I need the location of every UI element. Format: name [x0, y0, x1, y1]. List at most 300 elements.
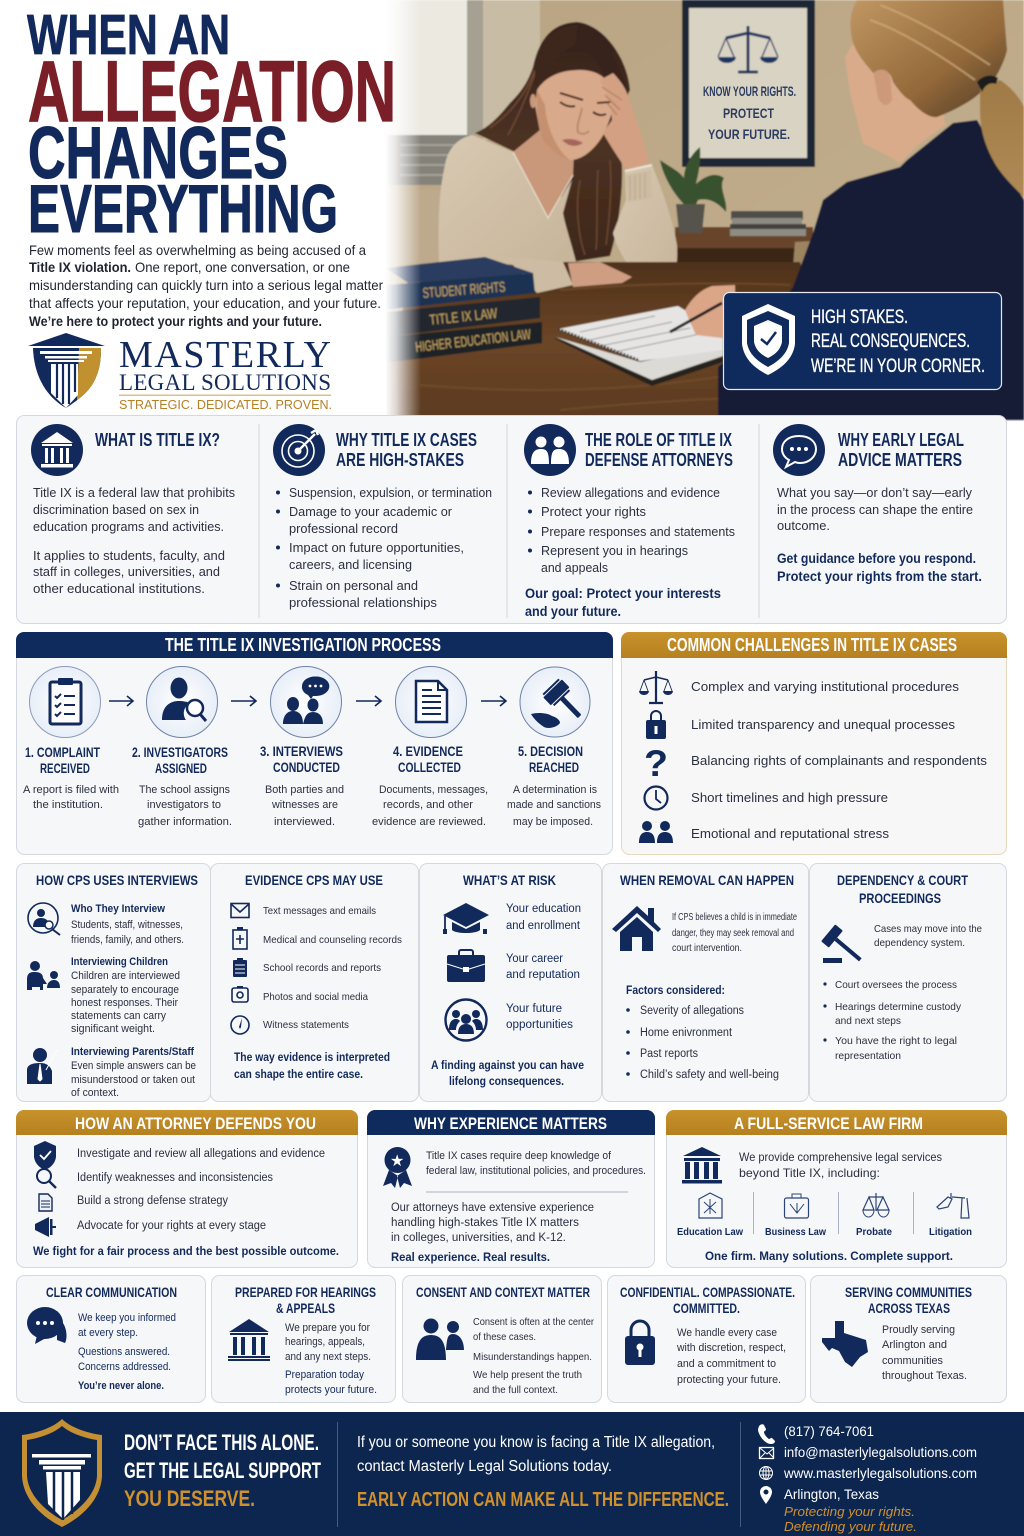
panel: clear communication: Questions answered. — [78, 1346, 170, 1358]
intro text: One report, one conversation, or one — [135, 259, 350, 275]
panel: evidence CPS may use: Medical and counseling records — [263, 934, 402, 946]
panel: prepared for hearings: PREPARED FOR HEARINGS — [235, 1284, 376, 1300]
panel: a full-service law firm: We provide comprehensive legal services — [739, 1150, 942, 1164]
contact details: info@masterlylegalsolutions.com — [784, 1444, 977, 1460]
panel: consent and context — [402, 1276, 602, 1402]
panel: clear communication: We keep you informed — [78, 1312, 176, 1324]
header: attorney defends — [16, 1110, 358, 1135]
text: contact prompt: EARLY ACTION CAN MAKE ALL THE DIFFERENCE. — [357, 1489, 729, 1511]
contact details — [758, 1423, 977, 1504]
panel: how an attorney defends you: Advocate for your rights at every stage — [77, 1220, 266, 1232]
panel: serving communities across Texas: SERVING COMMUNITIES — [845, 1284, 972, 1300]
column: why high-stakes — [273, 424, 492, 610]
panel: when removal can happen: court intervention. — [672, 943, 742, 954]
step 4: evidence collected: Documents, messages, — [379, 784, 488, 796]
icon: chat bubbles — [27, 1307, 66, 1344]
logo shield — [28, 333, 105, 408]
panel: how CPS uses interviews: misunderstood or taken out — [71, 1074, 195, 1086]
text: interpretation note: The way evidence is interpreted — [234, 1052, 390, 1064]
panel: consent and context: Misunderstandings happen. — [473, 1351, 592, 1363]
column: early legal advice: ADVICE MATTERS — [838, 449, 962, 470]
icon: attorneys — [524, 424, 576, 476]
column: what is Title IX — [31, 424, 235, 596]
step 2: investigators assigned: gather information. — [138, 816, 232, 828]
header: attorney defends: HOW AN ATTORNEY DEFENDS YOU — [75, 1114, 316, 1133]
panel: clear communication: You’re never alone. — [78, 1380, 164, 1392]
footer call to action — [0, 1412, 1024, 1536]
panel: evidence CPS may use: Witness statements — [263, 1019, 349, 1031]
step 4: evidence collected: COLLECTED — [398, 760, 461, 775]
icon: camera — [232, 986, 248, 1002]
icon: target — [273, 424, 325, 476]
icon: clipboard — [30, 666, 100, 738]
text: interpretation note — [234, 1052, 390, 1081]
list: attorney duties — [528, 485, 735, 575]
step 2: investigators assigned: investigators to — [147, 799, 221, 811]
panel: dependency and court proceedings: and next steps — [835, 1015, 901, 1027]
tagline: Defending your future. — [784, 1519, 917, 1534]
panel: serving communities across Texas: ACROSS TEXAS — [868, 1300, 950, 1316]
intro text — [29, 242, 383, 329]
text: lifelong consequences: A finding against you can have — [431, 1060, 584, 1072]
icon: envelope — [760, 1448, 774, 1458]
column: early legal advice: WHY EARLY LEGAL — [838, 429, 964, 450]
title — [27, 3, 396, 247]
panel: what's at risk: WHAT’S AT RISK — [463, 872, 556, 888]
panel: when removal can happen: If CPS believes a child is in immediate — [672, 912, 797, 923]
column: role of defense attorneys: THE ROLE OF TITLE IX — [585, 429, 732, 450]
icon: lock — [646, 711, 666, 739]
panel: why experience matters — [367, 1110, 655, 1268]
panel: what's at risk: and enrollment — [506, 920, 581, 932]
list: factors considered: Severity of allegations — [640, 1005, 744, 1017]
icon: courthouse — [228, 1319, 270, 1361]
icon: phone — [758, 1424, 775, 1444]
title: CHANGES — [28, 113, 288, 194]
icon: clock — [644, 786, 668, 810]
icon: award ribbon — [383, 1147, 412, 1188]
panel: investigation process — [16, 632, 613, 854]
step 1: complaint received — [23, 666, 119, 811]
step 3: interviews conducted: witnesses are — [271, 799, 338, 811]
panel: clear communication — [16, 1276, 206, 1402]
list: consequences — [276, 485, 492, 610]
icon: scales — [639, 671, 673, 703]
text: fair process: We fight for a fair process and the best possible outcome. — [33, 1244, 339, 1258]
contact details: www.masterlylegalsolutions.com — [783, 1465, 977, 1481]
text: what is Title IX: It applies to students, faculty, and — [33, 548, 225, 563]
step 5: decision reached: made and sanctions — [507, 799, 601, 811]
panel: evidence CPS may use: EVIDENCE CPS MAY USE — [245, 872, 383, 888]
panel: how CPS uses interviews: friends, family, and others. — [71, 934, 184, 946]
panel: how CPS uses interviews: Interviewing Parents/Staff — [71, 1046, 194, 1058]
contact details: Arlington, Texas — [784, 1486, 879, 1502]
panel: dependency and court proceedings: Court oversees the process — [835, 979, 957, 991]
icon: law firm building — [682, 1147, 722, 1184]
icon: megaphone — [35, 1217, 56, 1237]
panel: consent and context: Consent is often at the center — [473, 1316, 594, 1328]
header: full-service: A FULL-SERVICE LAW FIRM — [734, 1114, 923, 1133]
step 2: investigators assigned — [132, 666, 232, 828]
panel: serving communities across Texas — [810, 1276, 1006, 1402]
column: why high-stakes: ARE HIGH-STAKES — [336, 449, 464, 470]
panel: how an attorney defends you: Identify weaknesses and inconsistencies — [77, 1172, 273, 1184]
step 1: complaint received: RECEIVED — [40, 761, 90, 776]
arrow — [481, 696, 506, 706]
panel: how an attorney defends you: Investigate and review all allegations and evidence — [77, 1148, 325, 1160]
text: what is Title IX: other educational institutions. — [33, 581, 205, 596]
column: early legal advice — [773, 424, 982, 584]
panel: dependency and court proceedings: dependency system. — [874, 937, 965, 949]
panel: prepared for hearings: and any next steps. — [285, 1351, 371, 1363]
panel: confidential, compassionate, committed — [608, 1276, 806, 1402]
step 3: interviews conducted — [260, 666, 344, 828]
panel: a full-service law firm — [666, 1110, 1007, 1268]
tagline: Protecting your rights. — [784, 1504, 915, 1519]
icon: business law — [784, 1194, 808, 1218]
icon: envelope — [231, 904, 249, 918]
step 5: decision reached: 5. DECISION — [518, 744, 583, 759]
panel: prepared for hearings: protects your future. — [285, 1384, 377, 1396]
panel: when removal can happen — [602, 864, 808, 1102]
list: consequences: Damage to your academic or — [289, 504, 453, 519]
panel: dependency and court proceedings: representation — [835, 1050, 901, 1062]
panel: how CPS uses interviews: honest responses. Their — [71, 997, 178, 1009]
step 2: investigators assigned: The school assigns — [139, 784, 230, 796]
text: our goal — [525, 586, 721, 619]
list: attorney duties: Prepare responses and statements — [541, 524, 735, 539]
column: what is Title IX: WHAT IS TITLE IX? — [95, 429, 220, 450]
step 3: interviews conducted: Both parties and — [265, 784, 344, 796]
panel: evidence CPS may use: School records and reports — [263, 962, 381, 974]
text: lifelong consequences — [431, 1060, 584, 1088]
text: don't face this alone: GET THE LEGAL SUPPORT — [124, 1458, 321, 1483]
panel: what's at risk: and reputation — [506, 969, 580, 981]
text: get guidance: Get guidance before you respond. — [777, 551, 976, 566]
list: consequences: careers, and licensing — [289, 557, 412, 572]
step 5: decision reached: A determination is — [513, 784, 597, 796]
icon: school record — [233, 958, 247, 977]
step 5: decision reached: may be imposed. — [513, 816, 593, 828]
icon: future group — [446, 1000, 486, 1040]
text: early advice — [777, 485, 973, 533]
text: contact prompt: If you or someone you know is facing a Title IX allegation, — [357, 1434, 715, 1451]
panel: clear communication: at every step. — [78, 1327, 138, 1339]
list: attorney duties: Protect your rights — [541, 504, 646, 519]
panel: dependency and court proceedings: DEPENDENCY & COURT — [837, 872, 968, 888]
logo: Masterly Legal Solutions: MASTERLY — [119, 334, 331, 376]
title: ALLEGATION — [28, 44, 396, 140]
panel: dependency and court proceedings — [810, 864, 1006, 1102]
icon: medical record — [233, 927, 247, 949]
panel: why experience matters: federal law, institutional policies, and procedures. — [426, 1165, 646, 1177]
icon: padlock — [625, 1321, 655, 1365]
white fade behind the headline — [0, 0, 421, 420]
logo: Masterly Legal Solutions: LEGAL SOLUTIONS — [119, 370, 331, 395]
panel: a full-service law firm: Probate — [856, 1226, 892, 1238]
panel: common challenges: Complex and varying institutional procedures — [691, 679, 960, 694]
step 4: evidence collected — [372, 666, 488, 828]
icon: house — [612, 906, 661, 951]
text: interpretation note: can shape the entire case. — [234, 1069, 363, 1081]
hero photo: distressed student with attorney: HIGHER EDUCATION LAW — [415, 327, 532, 356]
step 3: interviews conducted: 3. INTERVIEWS — [260, 744, 343, 759]
list: factors considered: Factors considered: — [626, 985, 725, 997]
text: don't face this alone: DON’T FACE THIS ALONE. — [124, 1430, 319, 1455]
text: what is Title IX: education programs and activities. — [33, 519, 224, 534]
icon: people — [639, 821, 673, 843]
panel: how CPS uses interviews: Interviewing Children — [71, 956, 168, 968]
callout: high stakes: HIGH STAKES. — [811, 307, 908, 328]
panel: clear communication: CLEAR COMMUNICATION — [46, 1284, 177, 1300]
intro text: that affects your reputation, your education, and your future. — [29, 295, 381, 311]
panel: dependency and court proceedings: Hearings determine custody — [835, 1001, 962, 1013]
text: contact prompt: contact Masterly Legal Solutions today. — [357, 1458, 612, 1475]
logo: Masterly Legal Solutions: STRATEGIC. DEDICATED. PROVEN. — [119, 397, 332, 412]
panel: evidence CPS may use: Photos and social media — [263, 991, 368, 1003]
panel: confidential, compassionate, committed: CONFIDENTIAL. COMPASSIONATE. — [620, 1284, 795, 1300]
panel: common challenges: Short timelines and high pressure — [691, 790, 888, 805]
panel: confidential, compassionate, committed: and a commitment to — [677, 1358, 776, 1370]
icon: award ribbon: ★ — [390, 1153, 404, 1170]
step 3: interviews conducted: CONDUCTED — [273, 760, 340, 775]
icon: shield — [34, 1141, 56, 1170]
panel: common challenges: Emotional and reputational stress — [691, 826, 890, 841]
icon: parent and child — [27, 961, 60, 990]
icon: courthouse — [31, 424, 83, 476]
panel: how CPS uses interviews: significant weight. — [71, 1023, 155, 1035]
panel: evidence CPS may use — [210, 864, 418, 1102]
panel: confidential, compassionate, committed: with discretion, respect, — [676, 1342, 786, 1354]
icon: litigation — [937, 1193, 969, 1218]
tagline — [784, 1504, 917, 1534]
icon: probate — [863, 1193, 889, 1217]
icon: investigator — [146, 666, 218, 738]
header: investigation process — [16, 632, 613, 658]
arrow — [109, 696, 133, 706]
panel: consent and context: We help present the truth — [473, 1369, 582, 1381]
icon: interview group — [270, 666, 342, 738]
logo: Masterly Legal Solutions — [28, 333, 332, 412]
icon: gavel — [520, 667, 590, 737]
column: role of defense attorneys — [524, 424, 735, 619]
panel: a full-service law firm: beyond Title IX, including: — [739, 1166, 880, 1180]
list: factors considered: Past reports — [640, 1048, 698, 1060]
icon: question mark: ? — [644, 743, 668, 784]
panel: clear communication: Concerns addressed. — [78, 1361, 171, 1373]
step 3: interviews conducted: interviewed. — [274, 816, 335, 828]
intro text: Few moments feel as overwhelming as being accused of a — [29, 242, 366, 258]
panel: what's at risk: Your future — [506, 1003, 562, 1015]
step 4: evidence collected: evidence are reviewed. — [372, 816, 486, 828]
panel: how CPS uses interviews: statements can carry — [71, 1010, 166, 1022]
icon: briefcase — [447, 950, 485, 982]
panel: why experience matters: in colleges, universities, and K-12. — [391, 1232, 566, 1244]
text: lifelong consequences: lifelong consequences. — [449, 1076, 564, 1088]
panel: how CPS uses interviews: of context. — [71, 1087, 119, 1099]
panel: prepared for hearings: hearings, appeals, — [285, 1336, 365, 1348]
header: investigation process: THE TITLE IX INVESTIGATION PROCESS — [165, 635, 441, 655]
icon: graduation cap — [443, 903, 489, 934]
text: early advice: outcome. — [777, 518, 830, 533]
text: don't face this alone: YOU DESERVE. — [124, 1486, 255, 1511]
panel: a full-service law firm: Education Law — [677, 1226, 744, 1238]
list: consequences: Strain on personal and — [289, 578, 418, 593]
panel: common challenges: Balancing rights of complainants and respondents — [691, 753, 988, 768]
panel: why experience matters: handling high-stakes Title IX matters — [391, 1217, 579, 1229]
text: our goal: and your future. — [525, 604, 621, 619]
intro text: We’re here to protect your rights and your future. — [29, 313, 322, 329]
panel: common challenges: Limited transparency and unequal processes — [691, 717, 956, 732]
panel: what's at risk — [420, 864, 602, 1102]
list: factors considered: Home enivronment — [640, 1027, 733, 1039]
list: consequences: professional record — [289, 521, 398, 536]
hero photo: distressed student with attorney: STUDENT RIGHTS — [422, 280, 506, 302]
panel: why experience matters: Our attorneys have extensive experience — [391, 1202, 594, 1214]
poster text in hero photo — [703, 83, 796, 142]
panel: serving communities across Texas: Arlington and — [882, 1339, 947, 1351]
panel: when removal can happen: WHEN REMOVAL CAN HAPPEN — [620, 872, 794, 888]
panel: evidence CPS may use: Text messages and emails — [263, 905, 376, 917]
list: consequences: professional relationships — [289, 595, 437, 610]
panel: how an attorney defends you: Build a strong defense strategy — [77, 1195, 228, 1207]
icon: location pin — [760, 1486, 772, 1504]
header: why experience matters: WHY EXPERIENCE MATTERS — [414, 1114, 607, 1133]
column: why high-stakes: WHY TITLE IX CASES — [336, 429, 477, 450]
text: one firm: One firm. Many solutions. Complete support. — [705, 1249, 953, 1263]
arrow — [356, 696, 381, 706]
text: early advice: What you say—or don’t say—early — [777, 485, 972, 500]
panel: consent and context: and the full context. — [473, 1384, 558, 1396]
panel: prepared for hearings — [212, 1276, 396, 1402]
panel: how CPS uses interviews: HOW CPS USES INTERVIEWS — [36, 872, 198, 888]
panel: how CPS uses interviews — [16, 864, 210, 1102]
text: don't face this alone — [124, 1430, 321, 1511]
panel: confidential, compassionate, committed: protecting your future. — [677, 1374, 781, 1386]
text: contact prompt — [357, 1434, 729, 1511]
icon: document — [396, 666, 466, 738]
contact details: (817) 764-7061 — [784, 1423, 874, 1439]
poster text in hero photo: KNOW YOUR RIGHTS. — [703, 83, 796, 99]
hero photo: distressed student with attorney: TITLE IX LAW — [429, 306, 498, 329]
panel: confidential, compassionate, committed: COMMITTED. — [673, 1300, 740, 1316]
panel: a full-service law firm: Business Law — [765, 1226, 827, 1238]
panel: how CPS uses interviews: Even simple answers can be — [71, 1060, 196, 1072]
panel: what's at risk: Your career — [506, 953, 563, 965]
panel: a full-service law firm: Litigation — [929, 1226, 972, 1238]
panel: prepared for hearings: & APPEALS — [276, 1300, 335, 1316]
panel: consent and context: of these cases. — [473, 1331, 536, 1343]
panel: common challenges — [621, 632, 1007, 854]
text: our goal: Our goal: Protect your interests — [525, 586, 721, 601]
icon: gavel — [821, 924, 867, 968]
list: factors considered: Child’s safety and well-being — [640, 1069, 779, 1081]
panel: why experience matters: Title IX cases require deep knowledge of — [426, 1150, 612, 1162]
text: early advice: in the process can shape the entire — [777, 502, 973, 517]
step 1: complaint received: A report is filed with — [23, 784, 119, 796]
step 2: investigators assigned: ASSIGNED — [155, 761, 207, 776]
title: EVERYTHING — [28, 171, 338, 247]
hero photo: distressed student with attorney — [380, 0, 1024, 420]
list: factors considered — [626, 985, 779, 1081]
title: WHEN AN — [27, 3, 230, 67]
panel: what's at risk: Your education — [506, 903, 581, 915]
panel: serving communities across Texas: communities — [882, 1355, 943, 1367]
header: why experience matters — [367, 1110, 655, 1135]
panel: how CPS uses interviews: separately to encourage — [71, 984, 179, 996]
step 5: decision reached: REACHED — [529, 760, 579, 775]
intro text: Title IX violation. — [29, 259, 131, 275]
list: attorney duties: Represent you in hearings — [541, 543, 688, 558]
text: what is Title IX: staff in colleges, universities, and — [33, 564, 220, 579]
arrow — [231, 696, 256, 706]
text: get guidance: Protect your rights from the start. — [777, 569, 982, 584]
text: get guidance — [777, 551, 982, 584]
icon: Texas map — [822, 1321, 868, 1367]
icon: pen statement — [231, 1016, 249, 1034]
panel: confidential, compassionate, committed: We handle every case — [677, 1327, 777, 1339]
panel: Title IX overview — [16, 416, 1006, 624]
step 1: complaint received: the institution. — [33, 799, 103, 811]
text: what is Title IX — [33, 485, 235, 596]
icon: globe — [760, 1466, 772, 1480]
icon: education law — [699, 1193, 722, 1218]
panel: prepared for hearings: We prepare you for — [285, 1322, 370, 1334]
list: attorney duties: Review allegations and evidence — [541, 485, 720, 500]
panel: how CPS uses interviews: Students, staff, witnesses, — [71, 919, 183, 931]
panel: serving communities across Texas: Proudly serving — [882, 1324, 955, 1336]
panel: how an attorney defends you — [16, 1110, 358, 1268]
panel: prepared for hearings: Preparation today — [285, 1369, 364, 1381]
panel: why experience matters: Real experience. Real results. — [391, 1250, 550, 1264]
step 4: evidence collected: records, and other — [383, 799, 473, 811]
panel: consent and context: CONSENT AND CONTEXT MATTER — [416, 1284, 590, 1300]
panel: dependency and court proceedings: Cases may move into the — [874, 923, 982, 935]
list: attorney duties: and appeals — [541, 560, 608, 575]
icon: footer shield — [22, 1419, 102, 1527]
icon: shield with check — [742, 304, 795, 375]
step 2: investigators assigned: 2. INVESTIGATORS — [132, 745, 228, 760]
step 4: evidence collected: 4. EVIDENCE — [393, 744, 463, 759]
step 1: complaint received: 1. COMPLAINT — [25, 745, 101, 760]
icon: interview search — [28, 903, 60, 935]
panel: how CPS uses interviews: Who They Interview — [71, 903, 165, 915]
column: role of defense attorneys: DEFENSE ATTORNEYS — [585, 449, 733, 470]
panel: how CPS uses interviews: Children are interviewed — [71, 970, 180, 982]
callout: high stakes — [724, 292, 1002, 390]
panel: when removal can happen: danger, they may seek removal and — [672, 928, 794, 939]
list: consequences: Impact on future opportunities, — [289, 540, 464, 555]
intro text: misunderstanding can quickly turn into a serious legal matter — [29, 277, 383, 293]
header: common challenges — [621, 632, 1007, 658]
header: full-service — [666, 1110, 1007, 1135]
text: what is Title IX: discrimination based on sex in — [33, 502, 199, 517]
icon: two people — [416, 1318, 464, 1360]
icon: magnifier — [37, 1169, 56, 1188]
panel: dependency and court proceedings: PROCEEDINGS — [859, 890, 941, 906]
poster text in hero photo: PROTECT — [723, 105, 774, 121]
icon: speech bubble — [773, 424, 825, 476]
panel: dependency and court proceedings: You have the right to legal — [835, 1035, 957, 1047]
text: what is Title IX: Title IX is a federal law that prohibits — [33, 485, 235, 500]
icon: document — [39, 1194, 52, 1211]
panel: what's at risk: opportunities — [506, 1019, 573, 1031]
icon: professional with tie — [27, 1048, 57, 1084]
step 5: decision reached — [507, 667, 601, 828]
poster text in hero photo: YOUR FUTURE. — [708, 126, 790, 142]
list: consequences: Suspension, expulsion, or termination — [289, 485, 492, 500]
panel: serving communities across Texas: throughout Texas. — [882, 1370, 967, 1382]
